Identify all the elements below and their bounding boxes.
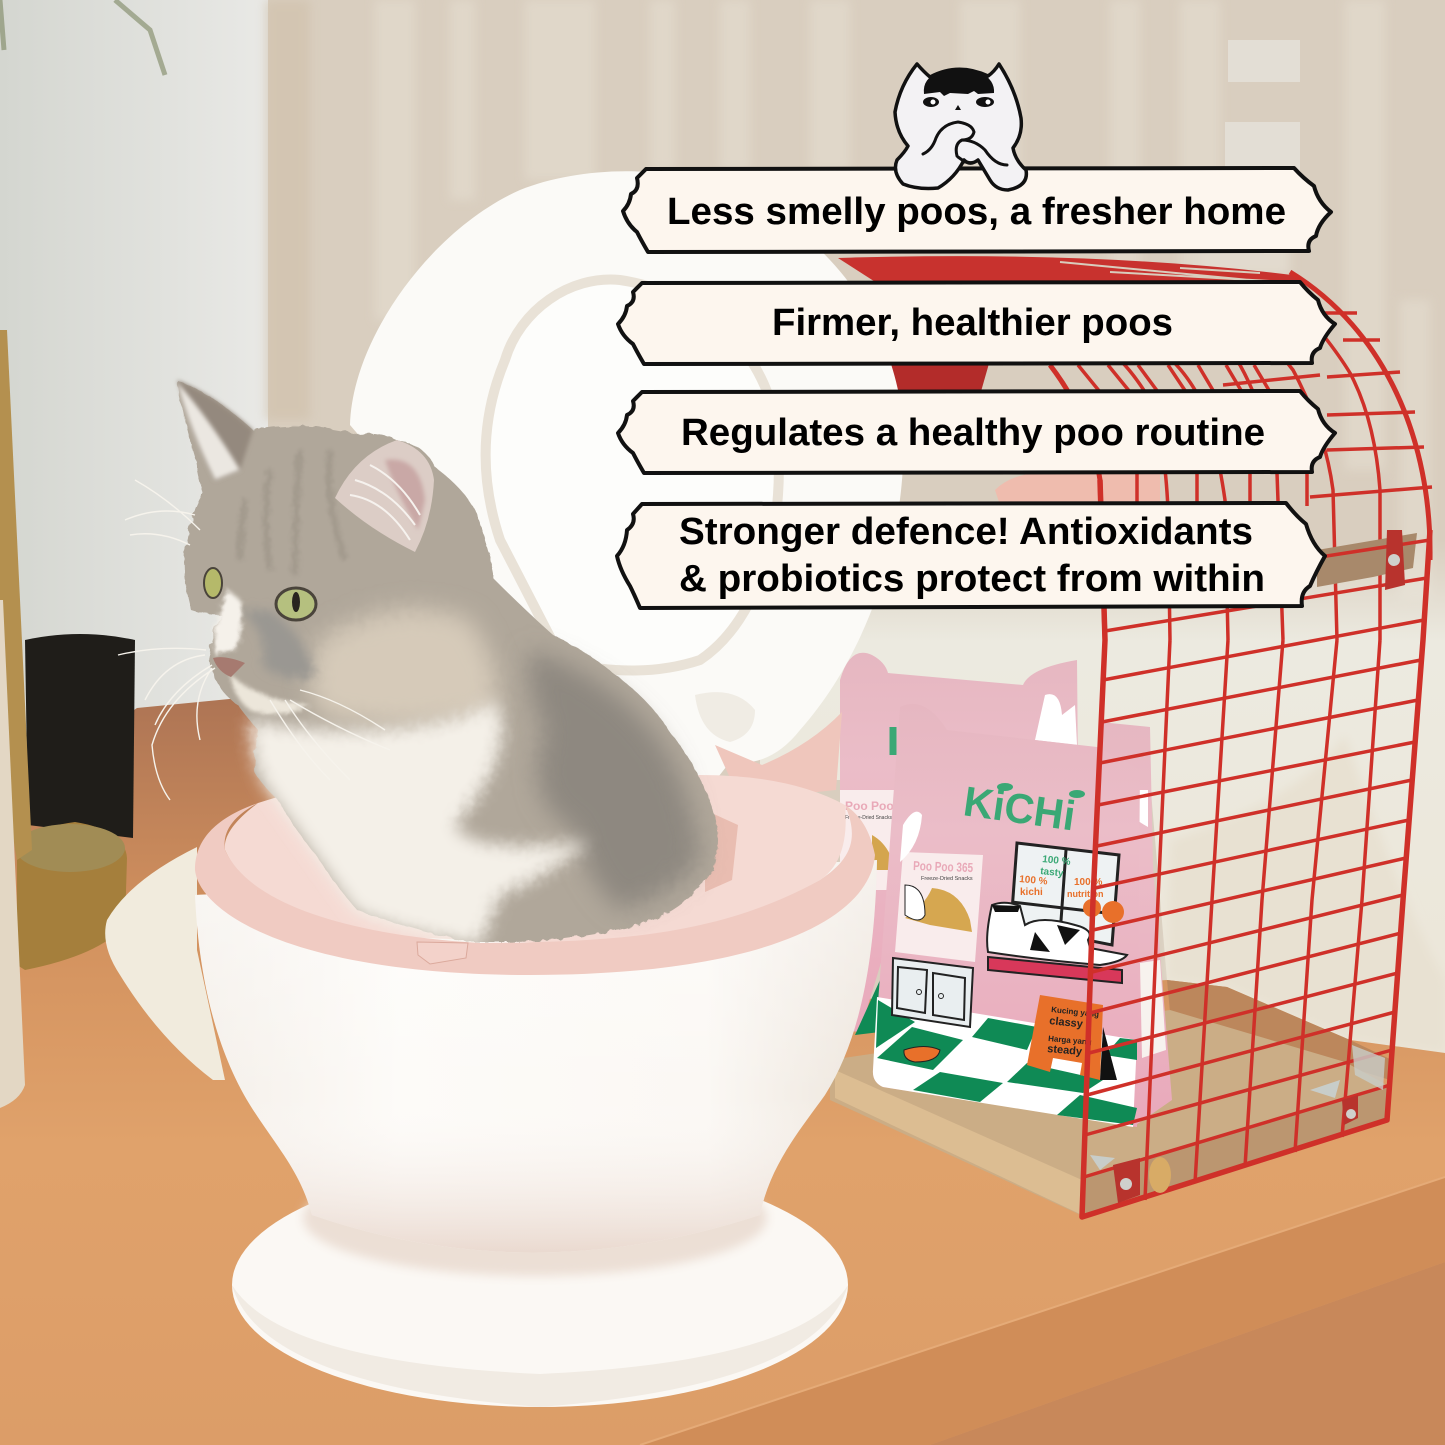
pouch window seat and cat bbox=[987, 899, 1127, 983]
pink hinge bbox=[715, 712, 842, 800]
front pouch bbox=[873, 704, 1140, 1127]
white cloth bbox=[105, 847, 225, 1080]
benefit banner 1 bbox=[623, 168, 1331, 252]
arch hanger plank bbox=[1317, 533, 1417, 587]
benefit banner 2: Firmer, healthier poos bbox=[772, 302, 1173, 344]
toilet bowl bbox=[195, 860, 877, 1252]
benefit banner 4 bbox=[617, 503, 1325, 608]
cat nose bbox=[213, 657, 245, 677]
benefit banner 4: & probiotics protect from within bbox=[679, 558, 1265, 600]
pouch floor tiles bbox=[876, 1000, 1137, 1125]
cat cream cheek bbox=[310, 609, 497, 725]
cat whiskers bbox=[118, 480, 390, 800]
pouch window: 100 % bbox=[1019, 874, 1048, 887]
middle pouch bbox=[1100, 722, 1172, 1127]
benefit banner 1: Less smelly poos, a fresher home bbox=[667, 191, 1286, 233]
cage front bbox=[1082, 480, 1430, 1217]
back pouch: Freeze-Dried Snacks bbox=[845, 815, 892, 821]
cage arch bbox=[838, 256, 1432, 640]
seat inner plate bbox=[225, 775, 846, 945]
cage vertical wires bbox=[1145, 640, 1380, 1200]
cat white chest bbox=[250, 700, 590, 945]
pouch window: tasty bbox=[1040, 866, 1064, 879]
cat eye left bbox=[204, 568, 222, 598]
pouch orange sign bbox=[1027, 995, 1117, 1080]
pink seat rim front bbox=[195, 803, 875, 975]
cat eye right bbox=[276, 588, 316, 620]
pouch product label bbox=[895, 852, 983, 962]
cat forehead stripes bbox=[240, 450, 345, 575]
objects behind the lid bbox=[885, 360, 1160, 505]
pouch product label: Freeze-Dried Snacks bbox=[921, 876, 973, 882]
arch outer frame bbox=[1290, 272, 1430, 560]
pouch window: kichi bbox=[1020, 887, 1043, 898]
pouch logo: KiCHi bbox=[961, 777, 1078, 839]
pouch orange sign: Kucing yang bbox=[1051, 1005, 1100, 1019]
pouch orange sign: steady bbox=[1047, 1043, 1083, 1058]
pouch orange sign: Harga yang bbox=[1048, 1034, 1092, 1047]
back pouch: Poo Poo 365 bbox=[845, 799, 917, 813]
cage screws and brackets bbox=[1090, 530, 1405, 1203]
pouch product label: Poo Poo 365 bbox=[913, 858, 973, 875]
arch transverse wires bbox=[1223, 313, 1432, 497]
pouch window: 100 % bbox=[1074, 877, 1102, 888]
pouch food bowl bbox=[904, 1046, 940, 1062]
arch longitudinal wires bbox=[1285, 290, 1380, 640]
wooden crate bbox=[830, 980, 1392, 1217]
table front edge bbox=[640, 1177, 1445, 1445]
cat body bbox=[177, 380, 718, 945]
pouch window bbox=[1011, 843, 1119, 945]
seat opening notch bbox=[705, 810, 738, 892]
benefit banner 2 bbox=[618, 282, 1335, 364]
cat left ear bbox=[177, 380, 253, 480]
plant stem bbox=[0, 0, 165, 75]
seat catch notch bbox=[417, 942, 468, 964]
cat grey muzzle bbox=[240, 610, 315, 678]
cage horizontal wires bbox=[1084, 540, 1430, 1177]
benefit banner 3: Regulates a healthy poo routine bbox=[681, 412, 1265, 454]
benefit banner 4: Stronger defence! Antioxidants bbox=[679, 511, 1253, 553]
toilet lid bbox=[350, 171, 903, 800]
toilet base bbox=[232, 1160, 848, 1407]
cat bbox=[118, 380, 718, 945]
arch top band bbox=[838, 256, 1310, 285]
pouch orange sign: classy bbox=[1049, 1015, 1084, 1031]
pouch window: nutrition bbox=[1067, 889, 1104, 899]
cage frame bbox=[1082, 480, 1430, 1217]
plant pot, stake, gold saucer and tube bbox=[0, 330, 135, 1108]
back pouch bbox=[840, 653, 1078, 1035]
cat dark flank bbox=[529, 650, 700, 910]
lid hinge knobs bbox=[695, 692, 755, 742]
mascot cat bbox=[895, 64, 1026, 190]
cat right ear bbox=[335, 440, 434, 552]
pouch window: 100 % bbox=[1042, 854, 1071, 868]
cat white blaze bbox=[214, 590, 242, 655]
lid seat ring bbox=[486, 280, 779, 671]
benefit banner 3 bbox=[618, 391, 1335, 473]
tabletop bbox=[0, 695, 1445, 1445]
white blanket behind cage bbox=[760, 540, 1445, 1053]
pouch cupboard bbox=[892, 958, 973, 1027]
